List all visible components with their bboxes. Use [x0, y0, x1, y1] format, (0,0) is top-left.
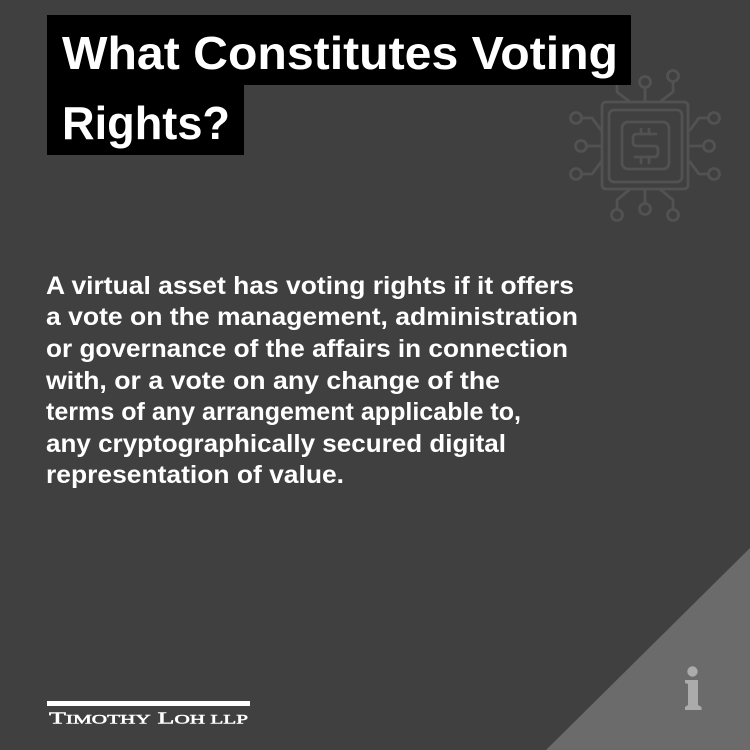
- body text block: or governance of the affairs in connection: [46, 335, 568, 363]
- body text block: terms of any arrangement applicable to,: [46, 398, 521, 426]
- body text block: [45, 272, 578, 489]
- logo: Timothy Loh LLP: T IMOTHY L OH LLP: [49, 708, 248, 728]
- title: Rights?: [62, 97, 230, 149]
- title: What Constitutes Voting: [62, 27, 618, 79]
- body text block: A virtual asset has voting rights if it offers: [46, 272, 574, 300]
- body text block: with, or a vote on any change of the: [45, 367, 500, 395]
- icon: crypto chip with dollar sign: [570, 70, 720, 220]
- logo: Timothy Loh LLP: [47, 701, 250, 728]
- icon: information i: [685, 666, 702, 710]
- title: [47, 15, 631, 155]
- corner triangle panel: [546, 548, 750, 750]
- body text block: representation of value.: [46, 461, 344, 489]
- body text block: a vote on the management, administration: [46, 303, 578, 331]
- body text block: any cryptographically secured digital: [46, 430, 506, 458]
